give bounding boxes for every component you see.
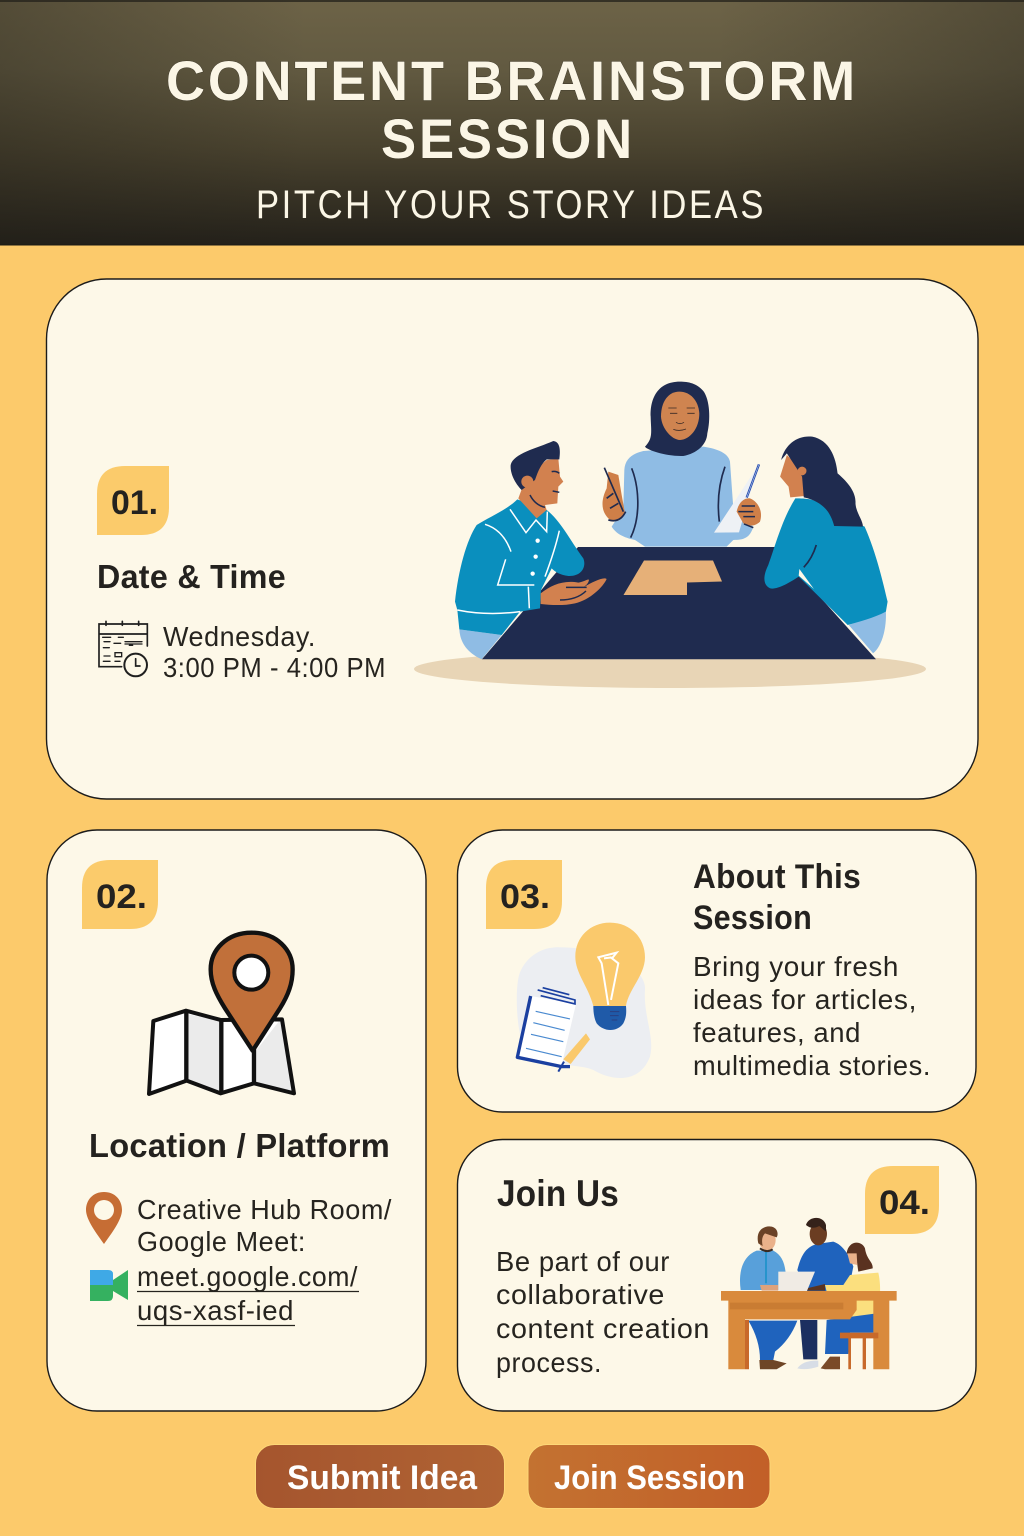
- left man: [455, 441, 607, 659]
- badge 01: 01.: [111, 484, 158, 522]
- location text: meet.google.com/: [137, 1261, 358, 1292]
- title: [166, 49, 858, 170]
- location text: Creative Hub Room/: [137, 1194, 392, 1225]
- button: submit idea: Submit Idea: [287, 1459, 478, 1497]
- heading: join us: Join Us: [497, 1173, 619, 1214]
- button: join session: Join Session: [554, 1459, 745, 1497]
- badge 03: 03.: [500, 878, 550, 916]
- location text: Google Meet:: [137, 1226, 306, 1257]
- icon: calendar and clock: [99, 621, 147, 676]
- title: SESSION: [381, 107, 635, 170]
- about text: features, and: [693, 1017, 861, 1048]
- about text: ideas for articles,: [693, 984, 917, 1015]
- title: CONTENT BRAINSTORM: [166, 49, 858, 112]
- badge 01: [97, 466, 169, 535]
- date and time text: 3:00 PM - 4:00 PM: [163, 652, 386, 683]
- heading: about this session: [693, 858, 861, 937]
- heading: location / platform: Location / Platform: [89, 1127, 390, 1164]
- join text: process.: [496, 1347, 602, 1378]
- heading: date and time: Date & Time: [97, 558, 286, 595]
- middle person in hijab: [602, 382, 761, 547]
- paper on table: [624, 560, 722, 595]
- about text: multimedia stories.: [693, 1050, 931, 1081]
- join text: collaborative: [496, 1279, 665, 1310]
- button: submit idea: [256, 1444, 504, 1508]
- about text: Bring your fresh: [693, 951, 899, 982]
- icon: folded map with pin: [149, 933, 294, 1094]
- panel 03: about this session: [458, 830, 976, 1112]
- join text: Be part of our: [496, 1246, 670, 1277]
- illustration: three people at a table: [414, 382, 926, 688]
- table: [482, 547, 876, 659]
- icon: small location pin: [86, 1192, 122, 1244]
- heading: about this session: About This: [693, 858, 861, 896]
- badge 03: [486, 860, 562, 929]
- illustration: team around a desk: [721, 1218, 897, 1369]
- badge 02: 02.: [96, 878, 147, 916]
- right woman: [764, 436, 888, 653]
- header banner: [0, 0, 1024, 245]
- subtitle: PITCH YOUR STORY IDEAS: [256, 183, 766, 227]
- standing man: [797, 1242, 853, 1292]
- join text: content creation: [496, 1313, 710, 1344]
- icon: video meeting camera: [90, 1270, 128, 1301]
- about text: [693, 951, 931, 1081]
- date and time text: [163, 621, 386, 683]
- panel 04: join us: [458, 1140, 976, 1411]
- panel 02: location: [47, 830, 426, 1411]
- heading: about this session: Session: [693, 899, 812, 937]
- illustration: lightbulb and clipboard: [517, 923, 651, 1078]
- seated man legs: [748, 1321, 797, 1360]
- badge 04: [865, 1166, 939, 1234]
- join text: [496, 1246, 710, 1378]
- button: join session: [528, 1444, 770, 1508]
- floor shadow: [414, 650, 926, 688]
- laptop: [778, 1272, 815, 1292]
- badge 02: [82, 860, 158, 929]
- badge 04: 04.: [879, 1184, 930, 1222]
- location text: [137, 1194, 392, 1326]
- desk: [721, 1291, 897, 1369]
- seated man: [740, 1251, 786, 1290]
- date and time text: Wednesday.: [163, 621, 316, 652]
- seated woman: [825, 1273, 880, 1319]
- panel 01: date and time: [46, 279, 978, 799]
- location text: uqs-xasf-ied: [137, 1295, 294, 1326]
- standing man legs: [800, 1320, 817, 1359]
